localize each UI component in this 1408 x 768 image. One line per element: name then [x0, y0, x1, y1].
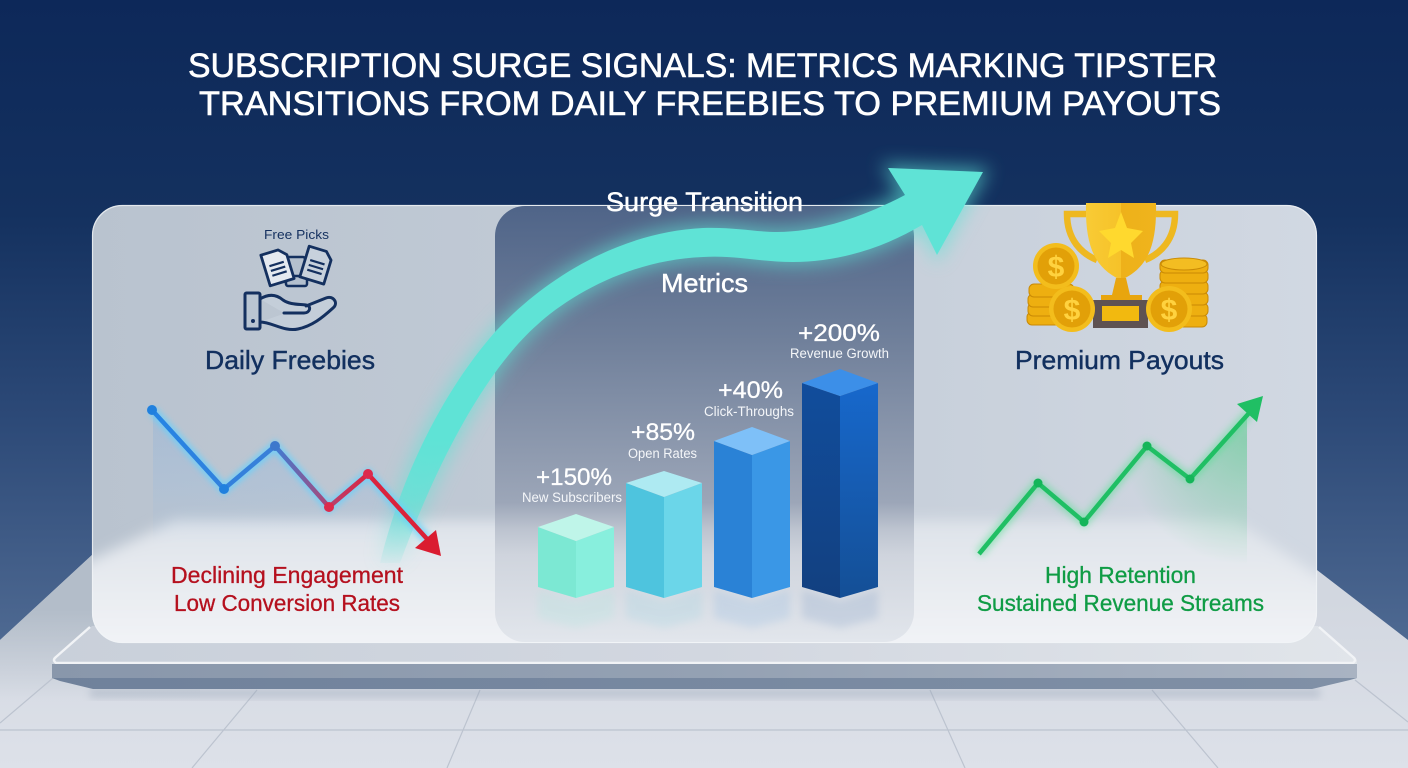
- glass panel: [70, 205, 1340, 660]
- trophy handles: [1067, 214, 1175, 260]
- coin stack left: [1027, 284, 1074, 325]
- caption: declining engagement: [171, 562, 404, 616]
- title: [188, 47, 1221, 123]
- coin bottom left: $: [1064, 294, 1081, 327]
- bar shadows: [538, 590, 878, 628]
- label: +200% revenue growth: Revenue Growth: [790, 346, 889, 361]
- caption: high retention: [977, 562, 1264, 616]
- coin bottom left: [1049, 286, 1095, 332]
- label: +85% open rates: +85%: [631, 419, 695, 446]
- coin top left: $: [1048, 251, 1065, 284]
- trophy plate: [1102, 306, 1139, 321]
- line chart: rising revenue: [979, 396, 1263, 565]
- document left: [261, 248, 294, 286]
- caption: high retention: Sustained Revenue Streams: [977, 590, 1264, 616]
- icon: trophy and coins: [1027, 203, 1208, 332]
- bar: open rates: [626, 471, 702, 598]
- label: +40% click-throughs: [704, 377, 794, 419]
- bar chart: [522, 320, 889, 628]
- caption: declining engagement: Declining Engagement: [171, 562, 404, 588]
- trophy base: [1093, 300, 1148, 328]
- hand: [260, 295, 335, 330]
- label: +40% click-throughs: Click-Throughs: [704, 404, 794, 419]
- middle documents: [285, 257, 307, 286]
- document right: [300, 246, 333, 284]
- platform base: [52, 626, 1357, 689]
- floor with tile grid: [0, 555, 1408, 768]
- heading: daily freebies: Daily Freebies: [205, 345, 375, 375]
- label: +150% new subscribers: New Subscribers: [522, 490, 622, 505]
- caption: high retention: High Retention: [1045, 562, 1196, 588]
- label: +85% open rates: [628, 419, 697, 461]
- coin bottom right: $: [1161, 294, 1178, 327]
- label: +200% revenue growth: +200%: [798, 320, 880, 347]
- panel: metrics centre: [495, 206, 914, 642]
- panel: premium payouts: [977, 203, 1264, 616]
- label: +40% click-throughs: +40%: [718, 377, 783, 404]
- trophy stem and plinth: [1101, 278, 1142, 300]
- label: +85% open rates: Open Rates: [628, 446, 697, 461]
- cuff: [245, 293, 260, 329]
- heading: metrics: Metrics: [661, 268, 748, 298]
- surge transition arrow: [380, 168, 983, 563]
- star: [1099, 212, 1143, 258]
- title: SUBSCRIPTION SURGE SIGNALS: METRICS MARKING TIPSTER: [188, 47, 1217, 85]
- label: +150% new subscribers: [522, 464, 622, 505]
- title: TRANSITIONS FROM DAILY FREEBIES TO PREMIUM PAYOUTS: [199, 85, 1221, 123]
- bar: revenue growth: [802, 369, 878, 598]
- coin stack right: [1160, 258, 1208, 327]
- trophy cup: [1086, 203, 1156, 280]
- panel: daily freebies: [147, 227, 441, 616]
- icon: free picks hand and documents: [245, 227, 335, 330]
- caption: declining engagement: Low Conversion Rates: [174, 590, 400, 616]
- label: free picks: Free Picks: [264, 227, 330, 242]
- heading: premium payouts: Premium Payouts: [1015, 345, 1224, 375]
- label: surge transition: Surge Transition: [606, 187, 803, 217]
- coin top left: [1033, 243, 1079, 289]
- label: +150% new subscribers: +150%: [536, 464, 612, 491]
- coin bottom right: [1146, 286, 1192, 332]
- bar: new subscribers: [538, 514, 614, 598]
- label: +200% revenue growth: [790, 320, 889, 361]
- line chart: declining engagement: [147, 405, 441, 556]
- bar: click-throughs: [714, 427, 790, 598]
